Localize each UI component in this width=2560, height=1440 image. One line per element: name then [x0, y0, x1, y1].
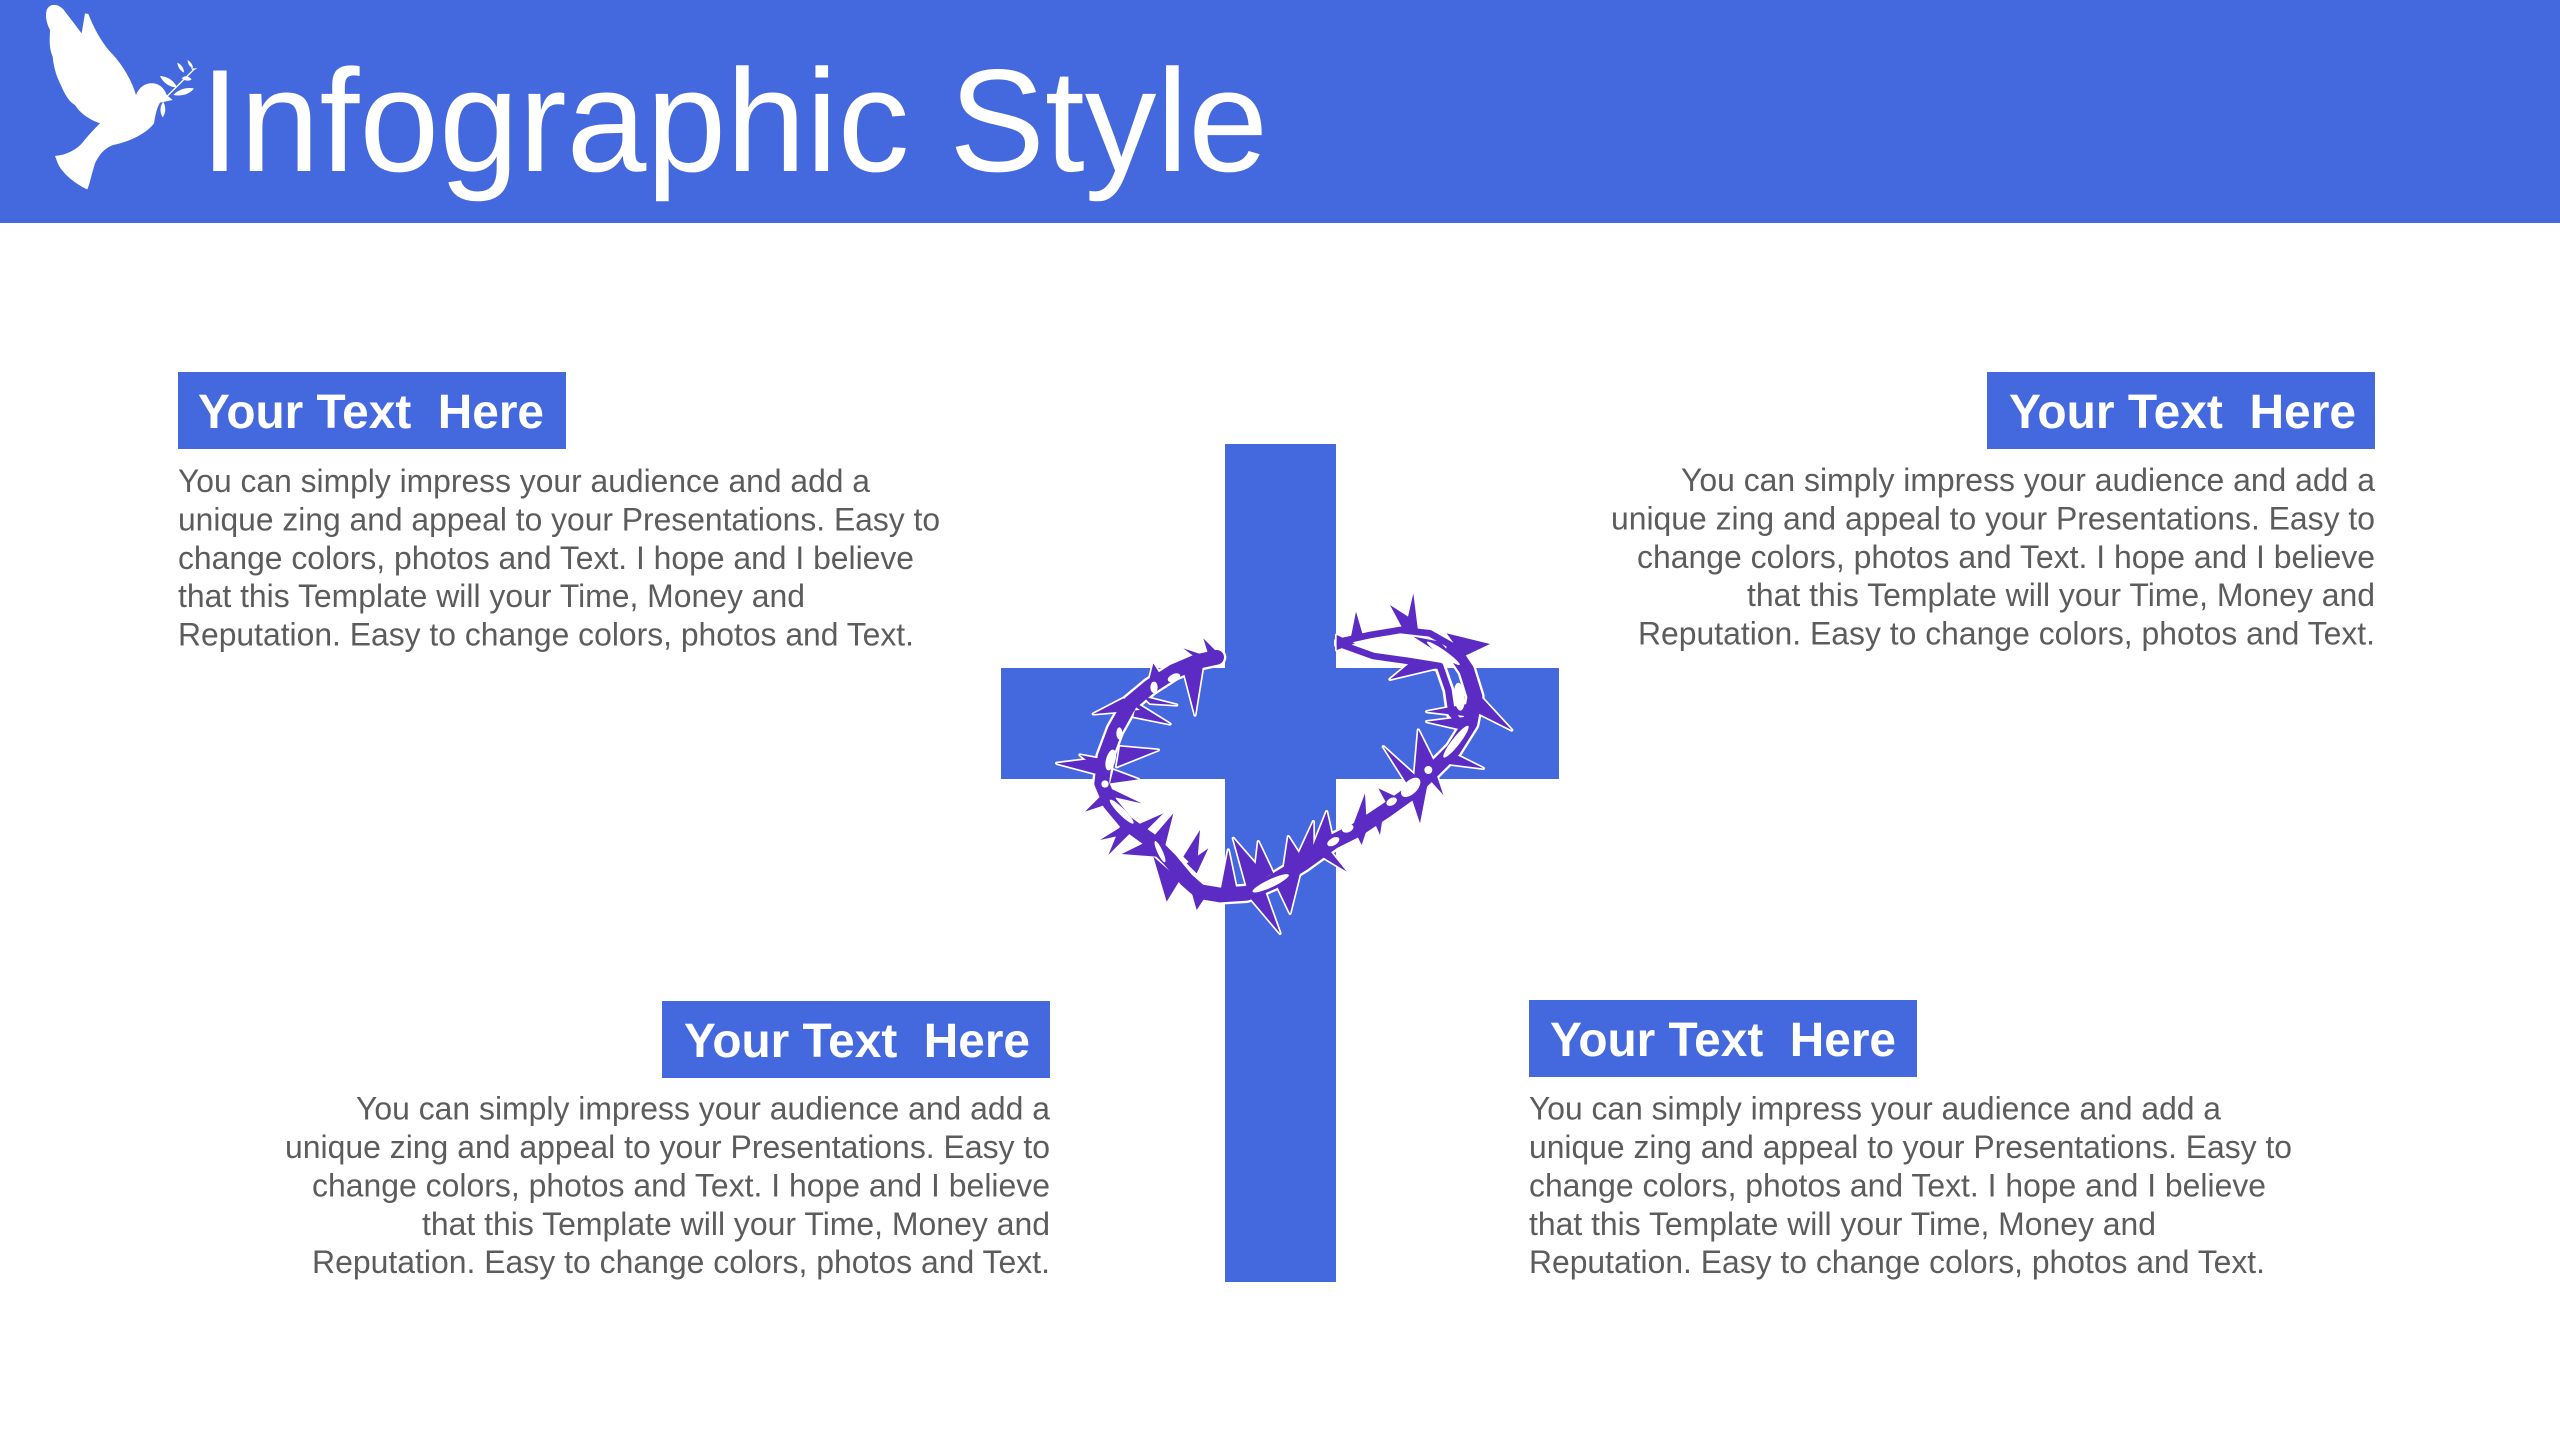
heading: top left: Your Text Here	[198, 386, 544, 439]
panel: bottom right	[1529, 1000, 2292, 1280]
heading: bottom right: Your Text Here	[1550, 1014, 1896, 1067]
text block: bottom left: change colors, photos and Text. I hope and I believe	[312, 1167, 1050, 1203]
text block: top right: change colors, photos and Text. I hope and I believe	[1637, 539, 2375, 575]
text block: bottom right	[1529, 1090, 2292, 1280]
heading: bottom left: Your Text Here	[684, 1015, 1030, 1068]
text block: bottom right: unique zing and appeal to your Presentations. Easy to	[1529, 1129, 2292, 1165]
heading: bottom right	[1529, 1000, 1917, 1077]
text block: top left	[178, 463, 940, 653]
text block: top right: unique zing and appeal to your Presentations. Easy to	[1611, 500, 2375, 536]
text block: top left: You can simply impress your audience and add a	[178, 463, 870, 499]
panel: top right	[1611, 372, 2375, 652]
text block: bottom left: You can simply impress your audience and add a	[356, 1090, 1050, 1126]
text block: top left: that this Template will your Time, Money and	[178, 578, 805, 614]
heading: top right	[1987, 372, 2375, 449]
text block: bottom left: that this Template will your Time, Money and	[422, 1206, 1050, 1242]
text block: top right: that this Template will your Time, Money and	[1747, 577, 2375, 613]
text block: top left: change colors, photos and Text. I hope and I believe	[178, 540, 914, 576]
text block: bottom right: that this Template will your Time, Money and	[1529, 1206, 2156, 1242]
icon: dove with olive branch	[46, 5, 197, 189]
text block: bottom left	[285, 1090, 1050, 1280]
text block: top left: Reputation. Easy to change colors, photos and Text.	[178, 617, 914, 653]
icon: crown of thorns	[1057, 593, 1512, 933]
title: Infographic Style	[200, 39, 1268, 202]
text block: bottom right: change colors, photos and Text. I hope and I believe	[1529, 1167, 2266, 1203]
header banner	[0, 0, 2560, 223]
cross	[1001, 444, 1559, 1282]
text block: bottom left: unique zing and appeal to your Presentations. Easy to	[285, 1129, 1050, 1165]
text block: bottom right: You can simply impress your audience and add a	[1529, 1090, 2221, 1126]
text block: top right: Reputation. Easy to change colors, photos and Text.	[1638, 616, 2375, 652]
panel: top left	[178, 372, 940, 653]
text block: top left: unique zing and appeal to your Presentations. Easy to	[178, 501, 940, 537]
text block: top right: You can simply impress your audience and add a	[1681, 462, 2375, 498]
text block: top right	[1611, 462, 2375, 652]
panel: bottom left	[285, 1001, 1050, 1280]
heading: top left	[178, 372, 566, 449]
heading: top right: Your Text Here	[2009, 386, 2356, 439]
text block: bottom left: Reputation. Easy to change colors, photos and Text.	[312, 1244, 1050, 1280]
heading: bottom left	[662, 1001, 1050, 1078]
text block: bottom right: Reputation. Easy to change colors, photos and Text.	[1529, 1244, 2265, 1280]
